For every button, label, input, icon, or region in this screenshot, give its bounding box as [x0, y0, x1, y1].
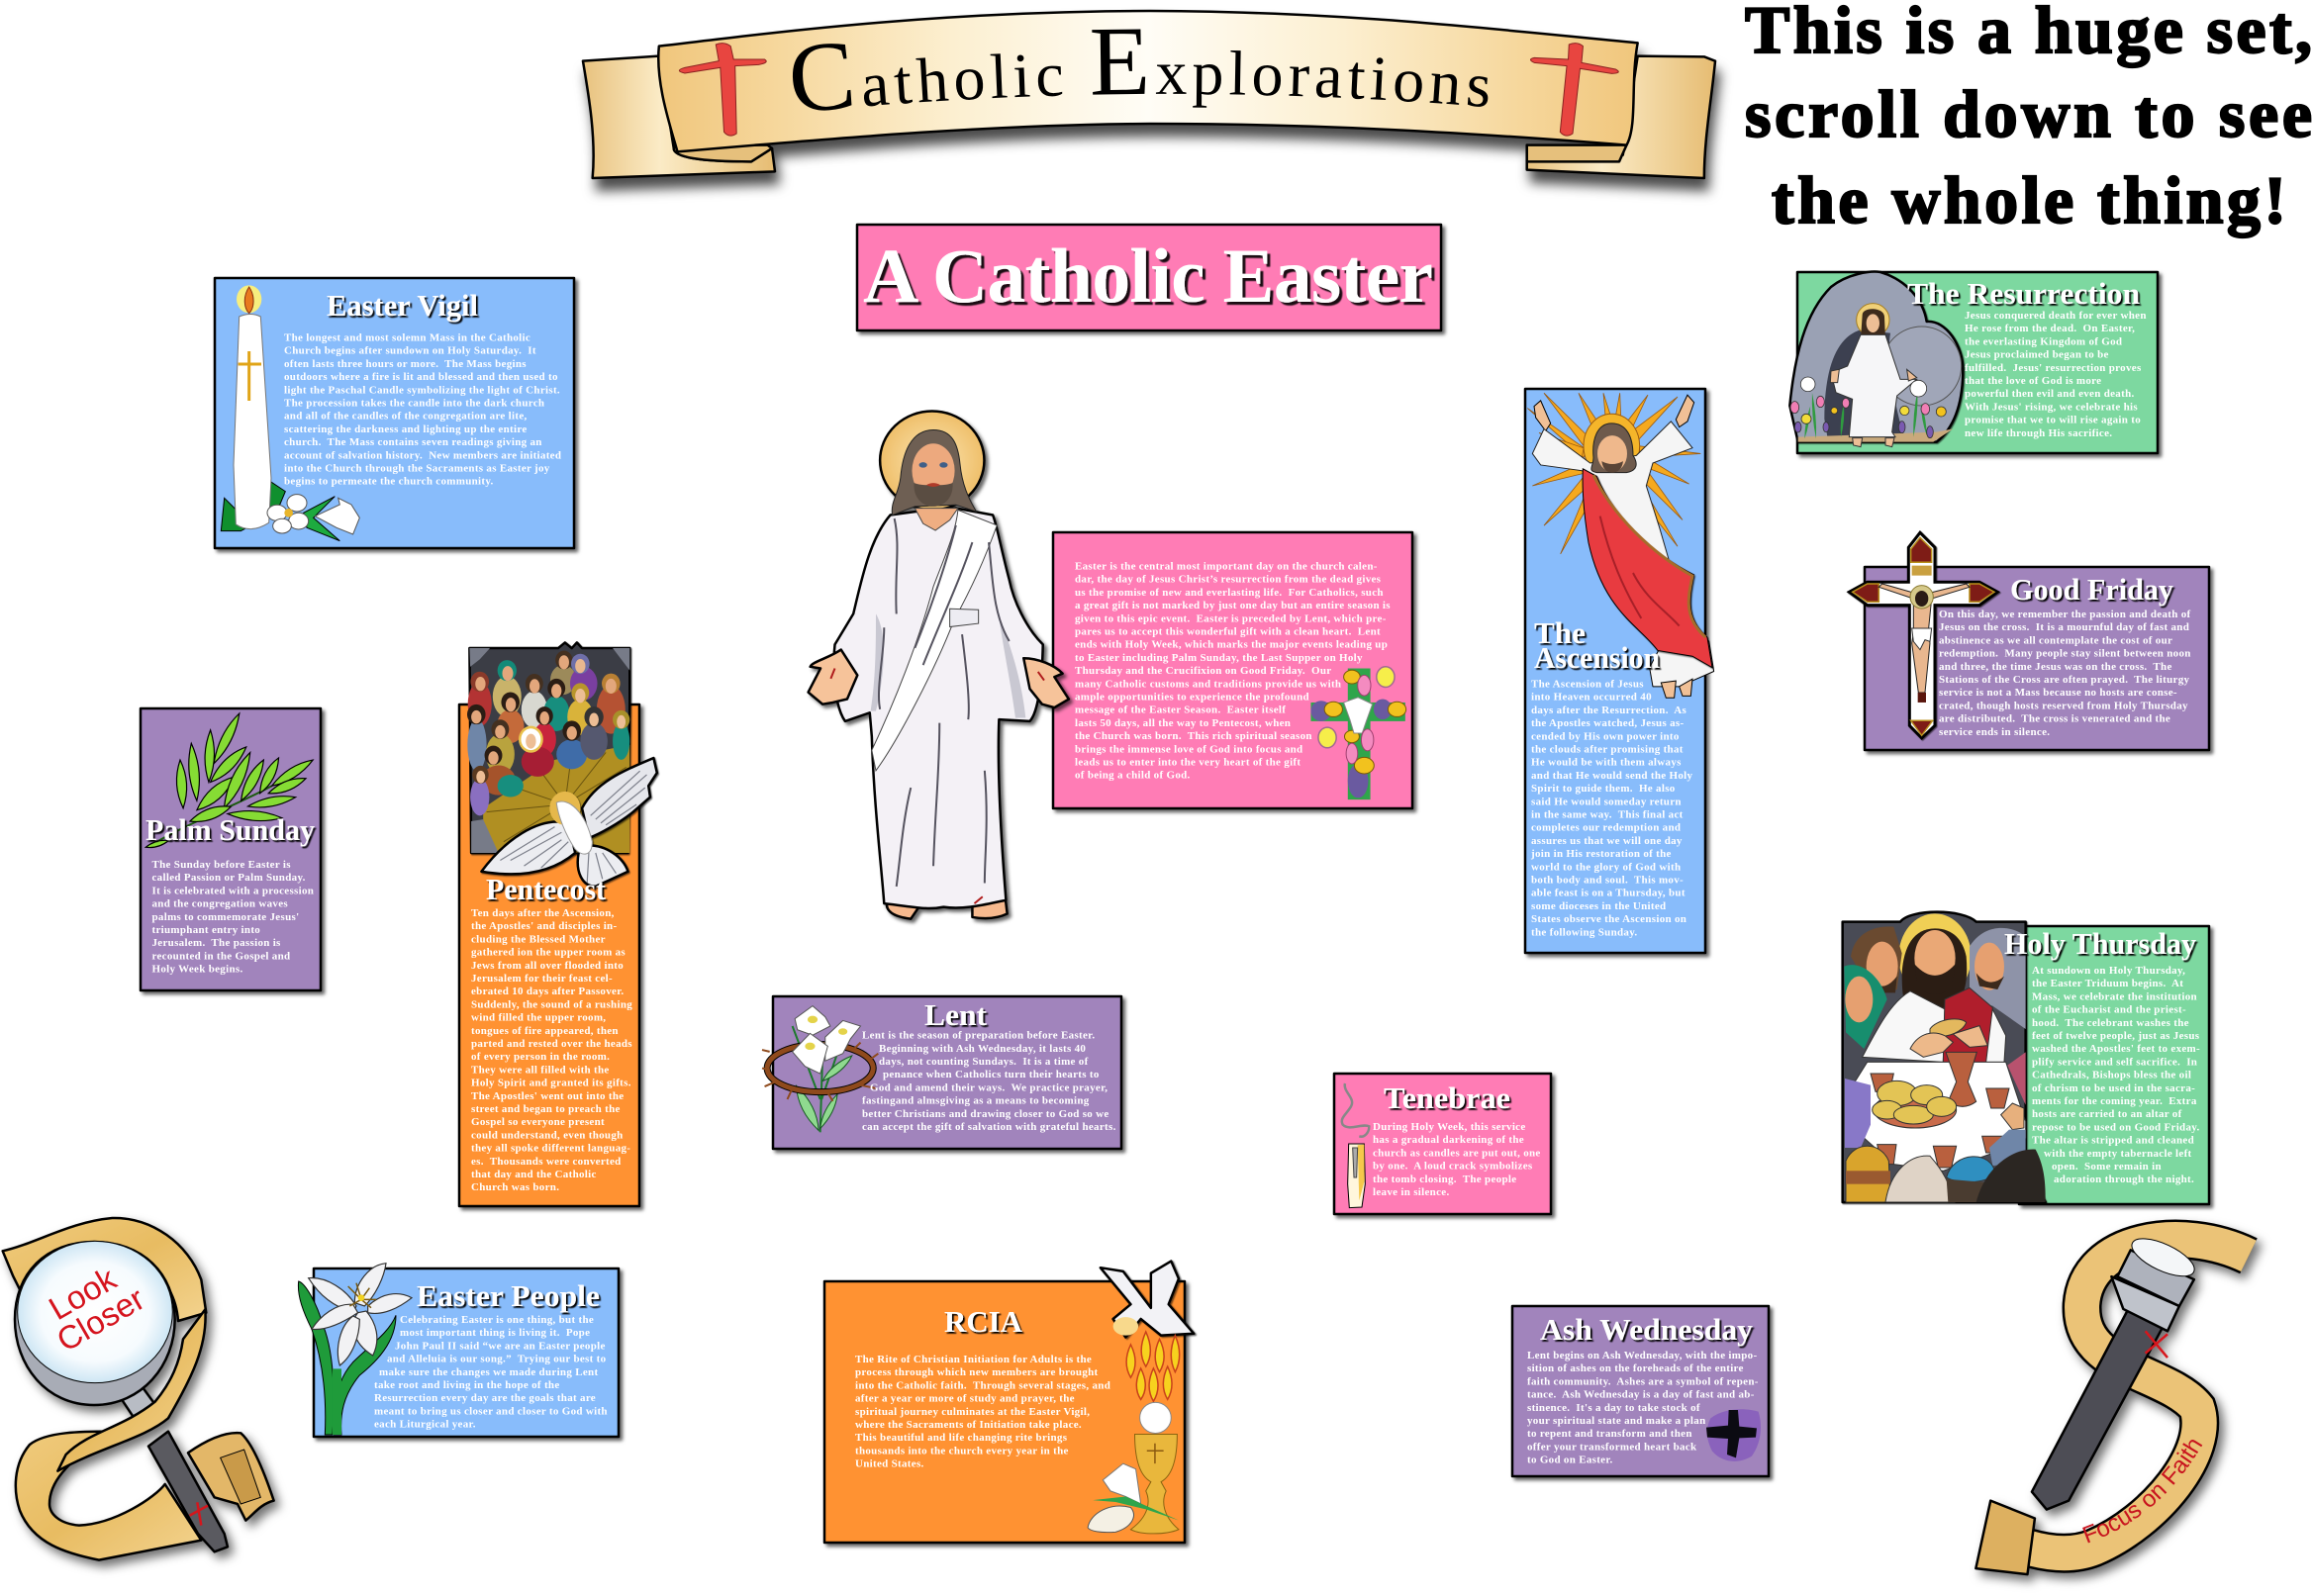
- body text: into Heaven occurred 40: [1531, 692, 1652, 704]
- body text: said He would someday return: [1531, 796, 1682, 807]
- body text: Cathedrals, Bishops bless the oil: [2032, 1070, 2191, 1081]
- body text: most important thing is living it. Pope: [400, 1327, 590, 1339]
- body text: washed the Apostles' feet to exem-: [2032, 1043, 2200, 1055]
- body text: scattering the darkness and lighting up the entire: [284, 423, 528, 435]
- heading: Pentecost: [486, 872, 607, 906]
- illustration: last supper: [1843, 912, 2046, 1202]
- body text: They were all filled with the: [471, 1064, 610, 1076]
- body text: meant to bring us closer and closer to God with: [374, 1405, 608, 1417]
- panel: Tenebrae: [1334, 1074, 1551, 1214]
- body text: tance. Ash Wednesday is a day of fast and ab-: [1527, 1389, 1755, 1401]
- body text: Church was born.: [471, 1181, 559, 1193]
- body text: The procession takes the candle into the dark church: [284, 398, 544, 410]
- body text: The Sunday before Easter is: [152, 859, 291, 871]
- heading: Good Friday: [2010, 572, 2173, 607]
- body text: make sure the changes we made during Lent: [379, 1366, 598, 1378]
- body text: new life through His sacrifice.: [1965, 427, 2112, 439]
- body text: The Ascension of Jesus: [1531, 679, 1644, 691]
- body text: better Christians and drawing closer to God so we: [862, 1108, 1109, 1120]
- body text: stinence. It's a day to take stock of: [1527, 1402, 1700, 1414]
- body text: repose to be used on Good Friday.: [2032, 1121, 2200, 1133]
- panel: The Resurrection: [1789, 272, 2158, 453]
- body text: often lasts three hours or more. The Mass begins: [284, 358, 527, 370]
- body text: completes our redemption and: [1531, 822, 1681, 834]
- body text: days, not counting Sundays. It is a time of: [879, 1056, 1089, 1068]
- body text: Beginning with Ash Wednesday, it lasts 40: [879, 1043, 1086, 1055]
- body text: to Easter including Palm Sunday, the Last Supper on Holy: [1075, 652, 1363, 664]
- body text: in the same way. This final act: [1531, 809, 1684, 821]
- body text: leave in silence.: [1373, 1186, 1450, 1198]
- body text: church as candles are put out, one: [1373, 1147, 1541, 1159]
- body text: and the congregation waves: [152, 898, 288, 910]
- body text: faith community. Ashes are a symbol of repen-: [1527, 1375, 1759, 1387]
- heading: Palm Sunday: [145, 812, 315, 847]
- body text: and all of the candles of the congregation are lite,: [284, 411, 528, 422]
- body text: open. Some remain in: [2052, 1161, 2162, 1173]
- body text: fulfilled. Jesus' resurrection proves: [1965, 362, 2142, 374]
- body text: triumphant entry into: [152, 924, 260, 936]
- icon: white lily: [298, 1264, 412, 1435]
- body text: the Easter Triduum begins. At: [2032, 978, 2183, 989]
- body text: cluding the Blessed Mother: [471, 933, 606, 945]
- body text: of the Eucharist and the priest-: [2032, 1004, 2186, 1016]
- body text: This beautiful and life changing rite brings: [855, 1432, 1068, 1444]
- body text: Jews from all over flooded into: [471, 960, 624, 972]
- body text: spiritual journey culminates at the Easter Vigil,: [855, 1406, 1090, 1418]
- body text: to God on Easter.: [1527, 1455, 1613, 1466]
- panel: Palm Sunday: [141, 708, 321, 990]
- body text: Thursday and the Crucifixion on Good Friday. Our: [1075, 665, 1332, 677]
- body text: wind filled the upper room,: [471, 1012, 606, 1024]
- body text: feet of twelve people, just as Jesus: [2032, 1030, 2200, 1042]
- body text: service ends in silence.: [1939, 726, 2050, 738]
- body text: world to the glory of God with: [1531, 861, 1681, 873]
- body text: given to this epic event. Easter is preceded by Lent, which pre-: [1075, 612, 1387, 624]
- body text: and that He would send the Holy: [1531, 770, 1693, 782]
- body text: the following Sunday.: [1531, 926, 1637, 938]
- body text: into the Catholic faith. Through several stages, and: [855, 1379, 1110, 1391]
- body text: At sundown on Holy Thursday,: [2032, 965, 2185, 977]
- body text: the Apostles' and disciples in-: [471, 920, 617, 932]
- heading: The Resurrection: [1907, 276, 2140, 311]
- body text: Holy Spirit and granted its gifts.: [471, 1078, 631, 1089]
- body text: fastingand almsgiving as a means to becoming: [862, 1095, 1090, 1107]
- body text: a great gift is not marked by just one day but an entire season is: [1075, 600, 1391, 611]
- body text: of chrism to be used in the sacra-: [2032, 1082, 2195, 1094]
- body text: thousands into the church every year in the: [855, 1445, 1069, 1456]
- body text: both body and soul. This mov-: [1531, 875, 1684, 887]
- body text: United States.: [855, 1458, 924, 1470]
- heading: RCIA: [944, 1304, 1023, 1339]
- notice: scroll down message: scroll down to see: [1745, 76, 2312, 151]
- body text: the everlasting Kingdom of God: [1965, 335, 2122, 347]
- body text: abstinence as we all contemplate the cost of our: [1939, 634, 2172, 646]
- body text: can accept the gift of salvation with grateful hearts.: [862, 1121, 1116, 1133]
- body text: parted and rested over the heads: [471, 1038, 632, 1050]
- body text: many Catholic customs and traditions provide us with: [1075, 678, 1341, 690]
- body text: the tomb closing. The people: [1373, 1174, 1516, 1185]
- body text: palms to commemorate Jesus': [152, 911, 299, 923]
- body text: With Jesus' rising, we celebrate his: [1965, 401, 2138, 413]
- body text: your spiritual state and make a plan: [1527, 1415, 1706, 1427]
- lens label: Look Closer: Look: [43, 1260, 123, 1327]
- body text: Jesus proclaimed began to be: [1965, 349, 2109, 361]
- body text: ample opportunities to experience the profound: [1075, 691, 1309, 703]
- body text: could understand, even though: [471, 1129, 624, 1141]
- panel: Pentecost: [459, 642, 657, 1206]
- body text: begins to permeate the church community.: [284, 476, 494, 488]
- body text: Celebrating Easter is one thing, but the: [400, 1314, 594, 1326]
- body text: outdoors where a fire is lit and blessed and then used to: [284, 371, 558, 383]
- ribbon label: Focus on Faith: Focus on Faith: [2082, 1440, 2203, 1544]
- panel: The Ascension: [1525, 389, 1714, 953]
- panel: RCIA: [824, 1262, 1194, 1543]
- body text: Lent begins on Ash Wednesday, with the impo-: [1527, 1350, 1757, 1361]
- body text: process through which new members are brought: [855, 1366, 1099, 1378]
- body text: lasts 50 days, all the way to Pentecost, when: [1075, 717, 1291, 729]
- panel: Easter introduction: [1053, 532, 1412, 808]
- icon: extinguished candle with smoke: [1342, 1083, 1369, 1208]
- body text: to repent and transform and then: [1527, 1428, 1692, 1440]
- heading: Tenebrae: [1384, 1080, 1510, 1115]
- heading: Easter Vigil: [327, 288, 478, 323]
- body text: Suddenly, the sound of a rushing: [471, 998, 632, 1010]
- body text: The longest and most solemn Mass in the Catholic: [284, 332, 530, 344]
- body text: are distributed. The cross is venerated and the: [1939, 713, 2170, 725]
- heading: Ash Wednesday: [1540, 1312, 1754, 1347]
- body text: redemption. Many people stay silent between noon: [1939, 648, 2191, 660]
- body text: Jerusalem. The passion is: [152, 937, 281, 949]
- body text: sition of ashes on the foreheads of the entire: [1527, 1362, 1744, 1374]
- icon: ash cross: [1706, 1409, 1761, 1461]
- body text: States observe the Ascension on: [1531, 913, 1686, 925]
- heading: Holy Thursday: [2004, 926, 2196, 961]
- body text: some dioceses in the United: [1531, 900, 1666, 912]
- body text: cended by His own power into: [1531, 730, 1680, 742]
- notice: scroll down message: [1745, 0, 2312, 237]
- body text: the clouds after promising that: [1531, 744, 1684, 756]
- illustration: empty tomb with risen Christ: [1789, 272, 1963, 447]
- body text: Stations of the Cross are often prayed. The liturgy: [1939, 674, 2190, 686]
- icon: dove, flames, chalice and lily: [1088, 1262, 1194, 1534]
- body text: Resurrection every day are the goals that are: [374, 1392, 596, 1404]
- body text: ebrated 10 days after Passover.: [471, 986, 624, 997]
- body text: es. Thousands were converted: [471, 1156, 622, 1168]
- body text: Gospel so everyone present: [471, 1116, 605, 1128]
- body text: Spirit to guide them. He also: [1531, 783, 1676, 795]
- illustration: apostles with tongues of fire: [467, 642, 629, 853]
- body text: Easter is the central most important day on the church calen-: [1075, 560, 1378, 572]
- body text: brings the immense love of God into focus and: [1075, 743, 1302, 755]
- illustration: ascending Christ: [1527, 393, 1714, 698]
- body text: plify service and self sacrifice. In: [2032, 1056, 2197, 1068]
- body text: has a gradual darkening of the: [1373, 1134, 1524, 1146]
- body text: called Passion or Palm Sunday.: [152, 872, 306, 884]
- body text: and Alleluia is our song.” Trying our best to: [387, 1354, 607, 1365]
- heading: Lent: [924, 997, 988, 1032]
- body text: assures us that we will one day: [1531, 835, 1683, 847]
- body text: message of the Easter Season. Easter itself: [1075, 704, 1286, 716]
- icon: paschal candle with flowers: [221, 285, 359, 541]
- body text: the Apostles watched, Jesus as-: [1531, 717, 1684, 729]
- body text: crated, though hosts reserved from Holy Thursday: [1939, 700, 2188, 711]
- panel: Lent: [762, 996, 1121, 1149]
- body text: promise that we to will rise again to: [1965, 415, 2141, 426]
- body text: Mass, we celebrate the institution: [2032, 990, 2197, 1002]
- body text: He would be with them always: [1531, 757, 1682, 769]
- body text: the Church was born. This rich spiritual season: [1075, 730, 1312, 742]
- body text: where the Sacraments of Initiation take place.: [855, 1419, 1082, 1431]
- body text: each Liturgical year.: [374, 1419, 476, 1431]
- icon: palm branch: [145, 711, 315, 850]
- body text: Jesus on the cross. It is a mournful day of fast and: [1939, 621, 2189, 633]
- body text: Jesus conquered death for ever when: [1965, 310, 2147, 322]
- panel: Good Friday: [1849, 532, 2209, 750]
- icon: lilies and crown of thorns: [762, 1006, 878, 1132]
- body text: Lent is the season of preparation before Easter.: [862, 1030, 1095, 1042]
- body text: join in His restoration of the: [1530, 848, 1672, 860]
- lens label: Look Closer: Closer: [50, 1279, 150, 1359]
- body text: offer your transformed heart back: [1527, 1441, 1697, 1453]
- icon: Focus on Faith flashlight with ribbon: [1974, 1218, 2266, 1588]
- body text: tongues of fire appeared, then: [471, 1025, 619, 1037]
- body text: that day and the Catholic: [471, 1169, 597, 1180]
- body text: that the love of God is more: [1965, 375, 2101, 387]
- body text: and three, the time Jesus was on the cross. The: [1939, 661, 2172, 673]
- body text: John Paul II said “we are an Easter people: [395, 1340, 606, 1352]
- body text: It is celebrated with a procession: [152, 885, 314, 896]
- body text: He rose from the dead. On Easter,: [1965, 323, 2135, 334]
- body text: able feast is on a Thursday, but: [1531, 888, 1686, 899]
- body text: hosts are carried to an altar of: [2032, 1108, 2182, 1120]
- body text: service is not a Mass because no hosts are conse-: [1939, 687, 2177, 699]
- icon: floral cross: [1310, 667, 1406, 799]
- body text: into the Church through the Sacraments as Easter joy: [284, 463, 550, 475]
- body text: street and began to preach the: [471, 1103, 621, 1115]
- title banner: Catholic Explorations scroll: [578, 10, 1729, 200]
- panel: Holy Thursday: [1843, 912, 2209, 1204]
- icon: descending dove: [481, 758, 657, 887]
- body text: after a year or more of study and prayer, the: [855, 1393, 1075, 1405]
- body text: powerful then evil and even death.: [1965, 388, 2135, 400]
- panel: Easter Vigil: [215, 278, 574, 548]
- body text: account of salvation history. New members are initiated: [284, 449, 561, 461]
- body text: us the promise of new and everlasting life. For Catholics, such: [1075, 587, 1384, 599]
- body text: ments for the coming year. Extra: [2032, 1095, 2197, 1107]
- body text: The Rite of Christian Initiation for Adults is the: [855, 1354, 1092, 1365]
- body text: adoration through the night.: [2054, 1174, 2194, 1185]
- illustration: risen Jesus figure: [809, 411, 1069, 919]
- body text: Church begins after sundown on Holy Saturday. It: [284, 345, 536, 357]
- body text: days after the Resurrection. As: [1531, 704, 1686, 716]
- panel: The Ascension: Ascension: [1534, 640, 1660, 675]
- icon: crucifix: [1849, 532, 1997, 738]
- heading: Easter People: [417, 1278, 600, 1313]
- body text: Holy Week begins.: [152, 964, 243, 976]
- panel: Ash Wednesday: [1512, 1306, 1769, 1476]
- body text: dar, the day of Jesus Christ’s resurrection from the dead gives: [1075, 574, 1382, 586]
- icon: Look Closer magnifying glass with ribbon: [3, 1218, 274, 1560]
- body text: church. The Mass contains seven readings giving an: [284, 436, 542, 448]
- body text: The Apostles' went out into the: [471, 1090, 624, 1102]
- panel: Easter People: [298, 1264, 619, 1437]
- body text: hood. The celebrant washes the: [2032, 1017, 2189, 1029]
- body text: gathered ion the upper room as: [471, 947, 626, 959]
- body text: pares us to accept this wonderful gift with a clean heart. Lent: [1075, 625, 1381, 637]
- body text: The altar is stripped and cleaned: [2032, 1135, 2194, 1147]
- body text: Jerusalem for their feast cel-: [471, 973, 613, 985]
- body text: by one. A loud crack symbolizes: [1373, 1161, 1533, 1173]
- body text: On this day, we remember the passion and death of: [1939, 609, 2190, 620]
- body text: During Holy Week, this service: [1373, 1121, 1526, 1133]
- body text: with the empty tabernacle left: [2044, 1148, 2192, 1160]
- body text: recounted in the Gospel and: [152, 950, 290, 962]
- body text: God and amend their ways. We practice prayer,: [870, 1081, 1108, 1093]
- notice: scroll down message: the whole thing!: [1772, 162, 2286, 237]
- body text: leads us to enter into the very heart of the gift: [1075, 756, 1300, 768]
- body text: of being a child of God.: [1075, 770, 1191, 782]
- body text: Ten days after the Ascension,: [471, 907, 615, 919]
- body text: take root and living in the hope of the: [374, 1379, 560, 1391]
- body text: light the Paschal Candle symbolizing the light of Christ.: [284, 384, 560, 396]
- banner lettering: Catholic Explorations: [792, 30, 1489, 111]
- heading plaque: A Catholic Easter: A Catholic Easter: [863, 233, 1433, 319]
- body text: penance when Catholics turn their hearts to: [883, 1069, 1100, 1080]
- body text: they all spoke different languag-: [471, 1143, 630, 1155]
- body text: of every person in the room.: [471, 1051, 610, 1063]
- body text: ends with Holy Week, which marks the major events leading up: [1075, 639, 1388, 651]
- heading: The: [1534, 615, 1586, 650]
